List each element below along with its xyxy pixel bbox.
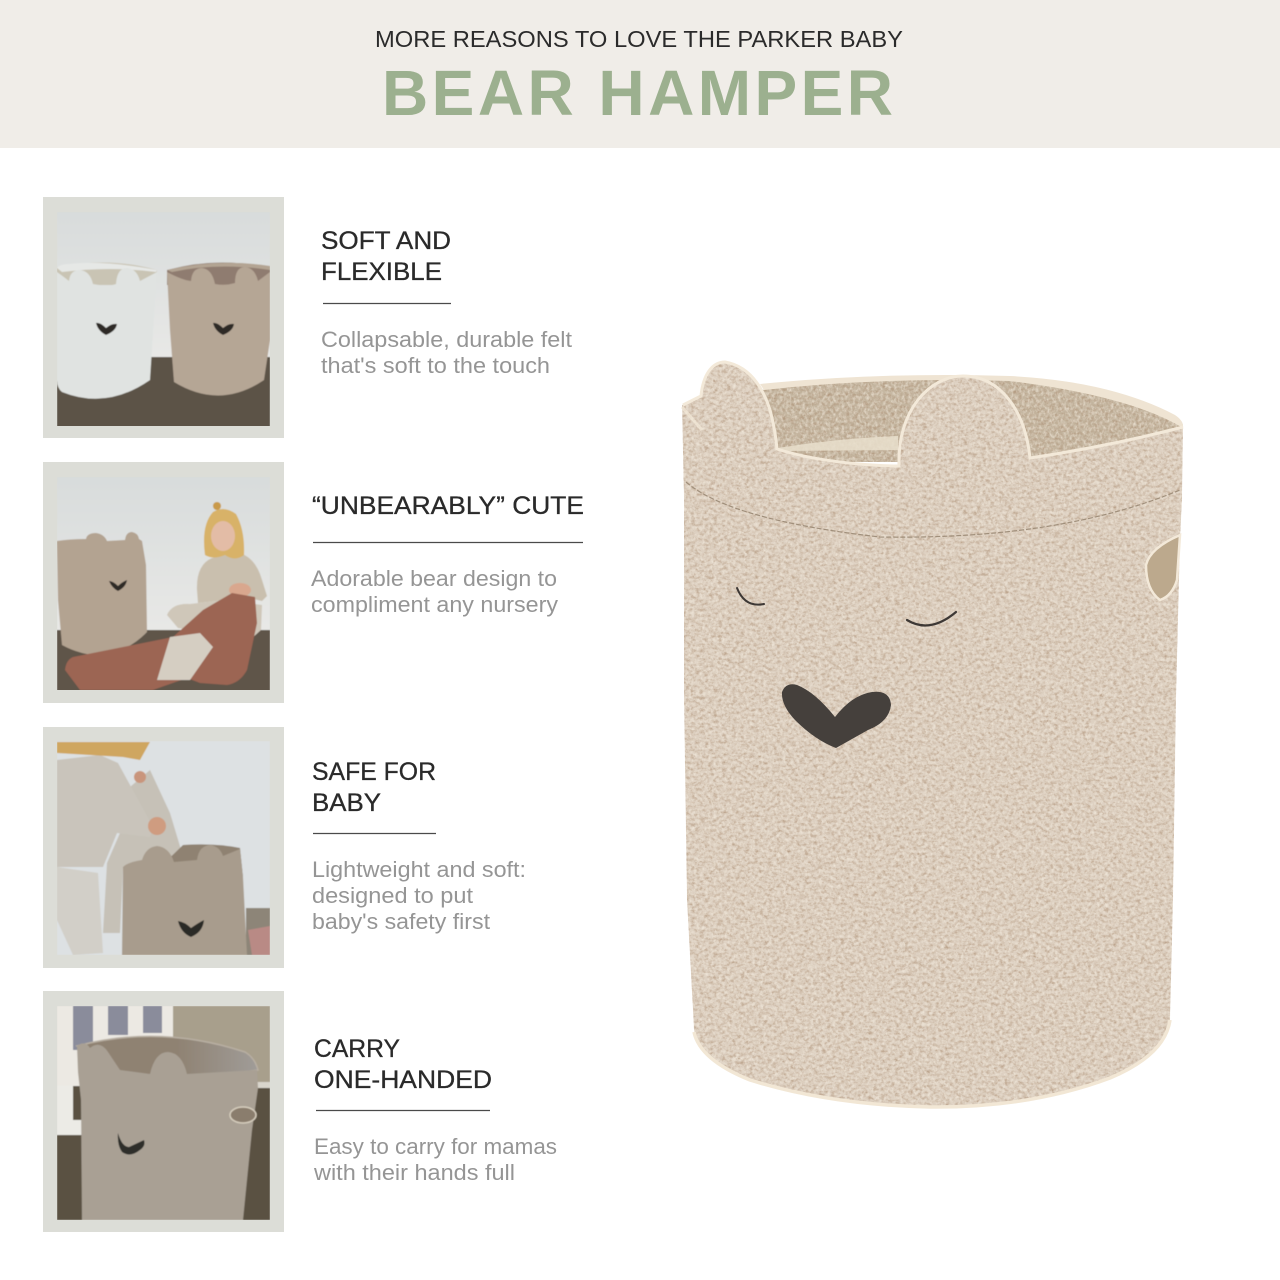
text block: safe for baby: baby's safety first	[312, 909, 490, 934]
panel: unbearably cute photo	[43, 462, 284, 703]
text block: safe for baby	[312, 758, 526, 934]
left eye	[737, 588, 764, 605]
hamper	[77, 1036, 258, 1220]
text block: soft and flexible	[321, 227, 572, 378]
text block: soft and flexible: FLEXIBLE	[321, 258, 442, 286]
text block: safe for baby: SAFE FOR	[312, 758, 436, 786]
text block: unbearably cute: Adorable bear design to	[311, 566, 557, 591]
right eye	[907, 612, 956, 625]
text block: unbearably cute: “UNBEARABLY” CUTE	[312, 492, 584, 520]
title: BEAR HAMPER	[382, 57, 893, 129]
panel: safe for baby photo	[43, 727, 284, 968]
header subtitle: MORE REASONS TO LOVE THE PARKER BABY	[375, 26, 903, 52]
text block: soft and flexible: SOFT AND	[321, 227, 451, 255]
panel: carry one-handed photo	[43, 991, 284, 1232]
text block: carry one-handed: Easy to carry for mamas	[314, 1134, 557, 1159]
beige hamper	[167, 262, 270, 396]
inner lip	[778, 436, 898, 451]
bottom edge	[694, 1020, 1170, 1107]
panel: soft and flexible photo	[43, 197, 284, 438]
text block: soft and flexible: that's soft to the touch	[321, 353, 550, 378]
blanket	[65, 593, 257, 690]
header band	[0, 0, 1280, 148]
text block: safe for baby: designed to put	[312, 883, 473, 908]
text block: carry one-handed: with their hands full	[313, 1160, 515, 1185]
girl	[167, 502, 267, 640]
left rim wedge	[682, 407, 702, 430]
text block: carry one-handed: CARRY	[314, 1035, 400, 1063]
stitch line	[686, 482, 1180, 537]
text block: soft and flexible: Collapsable, durable felt	[321, 327, 572, 352]
text block: unbearably cute: compliment any nursery	[311, 592, 558, 617]
hamper	[122, 844, 247, 955]
main bear hamper product	[682, 362, 1183, 1107]
handle opening	[1146, 535, 1180, 600]
crib	[57, 1006, 173, 1135]
hamper body	[682, 362, 1183, 1107]
child	[57, 742, 185, 955]
back rim	[760, 375, 1183, 428]
nose heart	[782, 684, 891, 748]
text block: carry one-handed: ONE-HANDED	[314, 1066, 492, 1094]
rim highlight	[683, 362, 1183, 466]
text block: unbearably cute	[311, 492, 584, 617]
white hamper	[57, 262, 157, 399]
hamper	[57, 532, 147, 656]
text block: safe for baby: BABY	[312, 789, 381, 817]
text block: carry one-handed	[313, 1035, 557, 1185]
hamper interior	[700, 376, 1183, 462]
text block: safe for baby: Lightweight and soft:	[312, 857, 526, 882]
